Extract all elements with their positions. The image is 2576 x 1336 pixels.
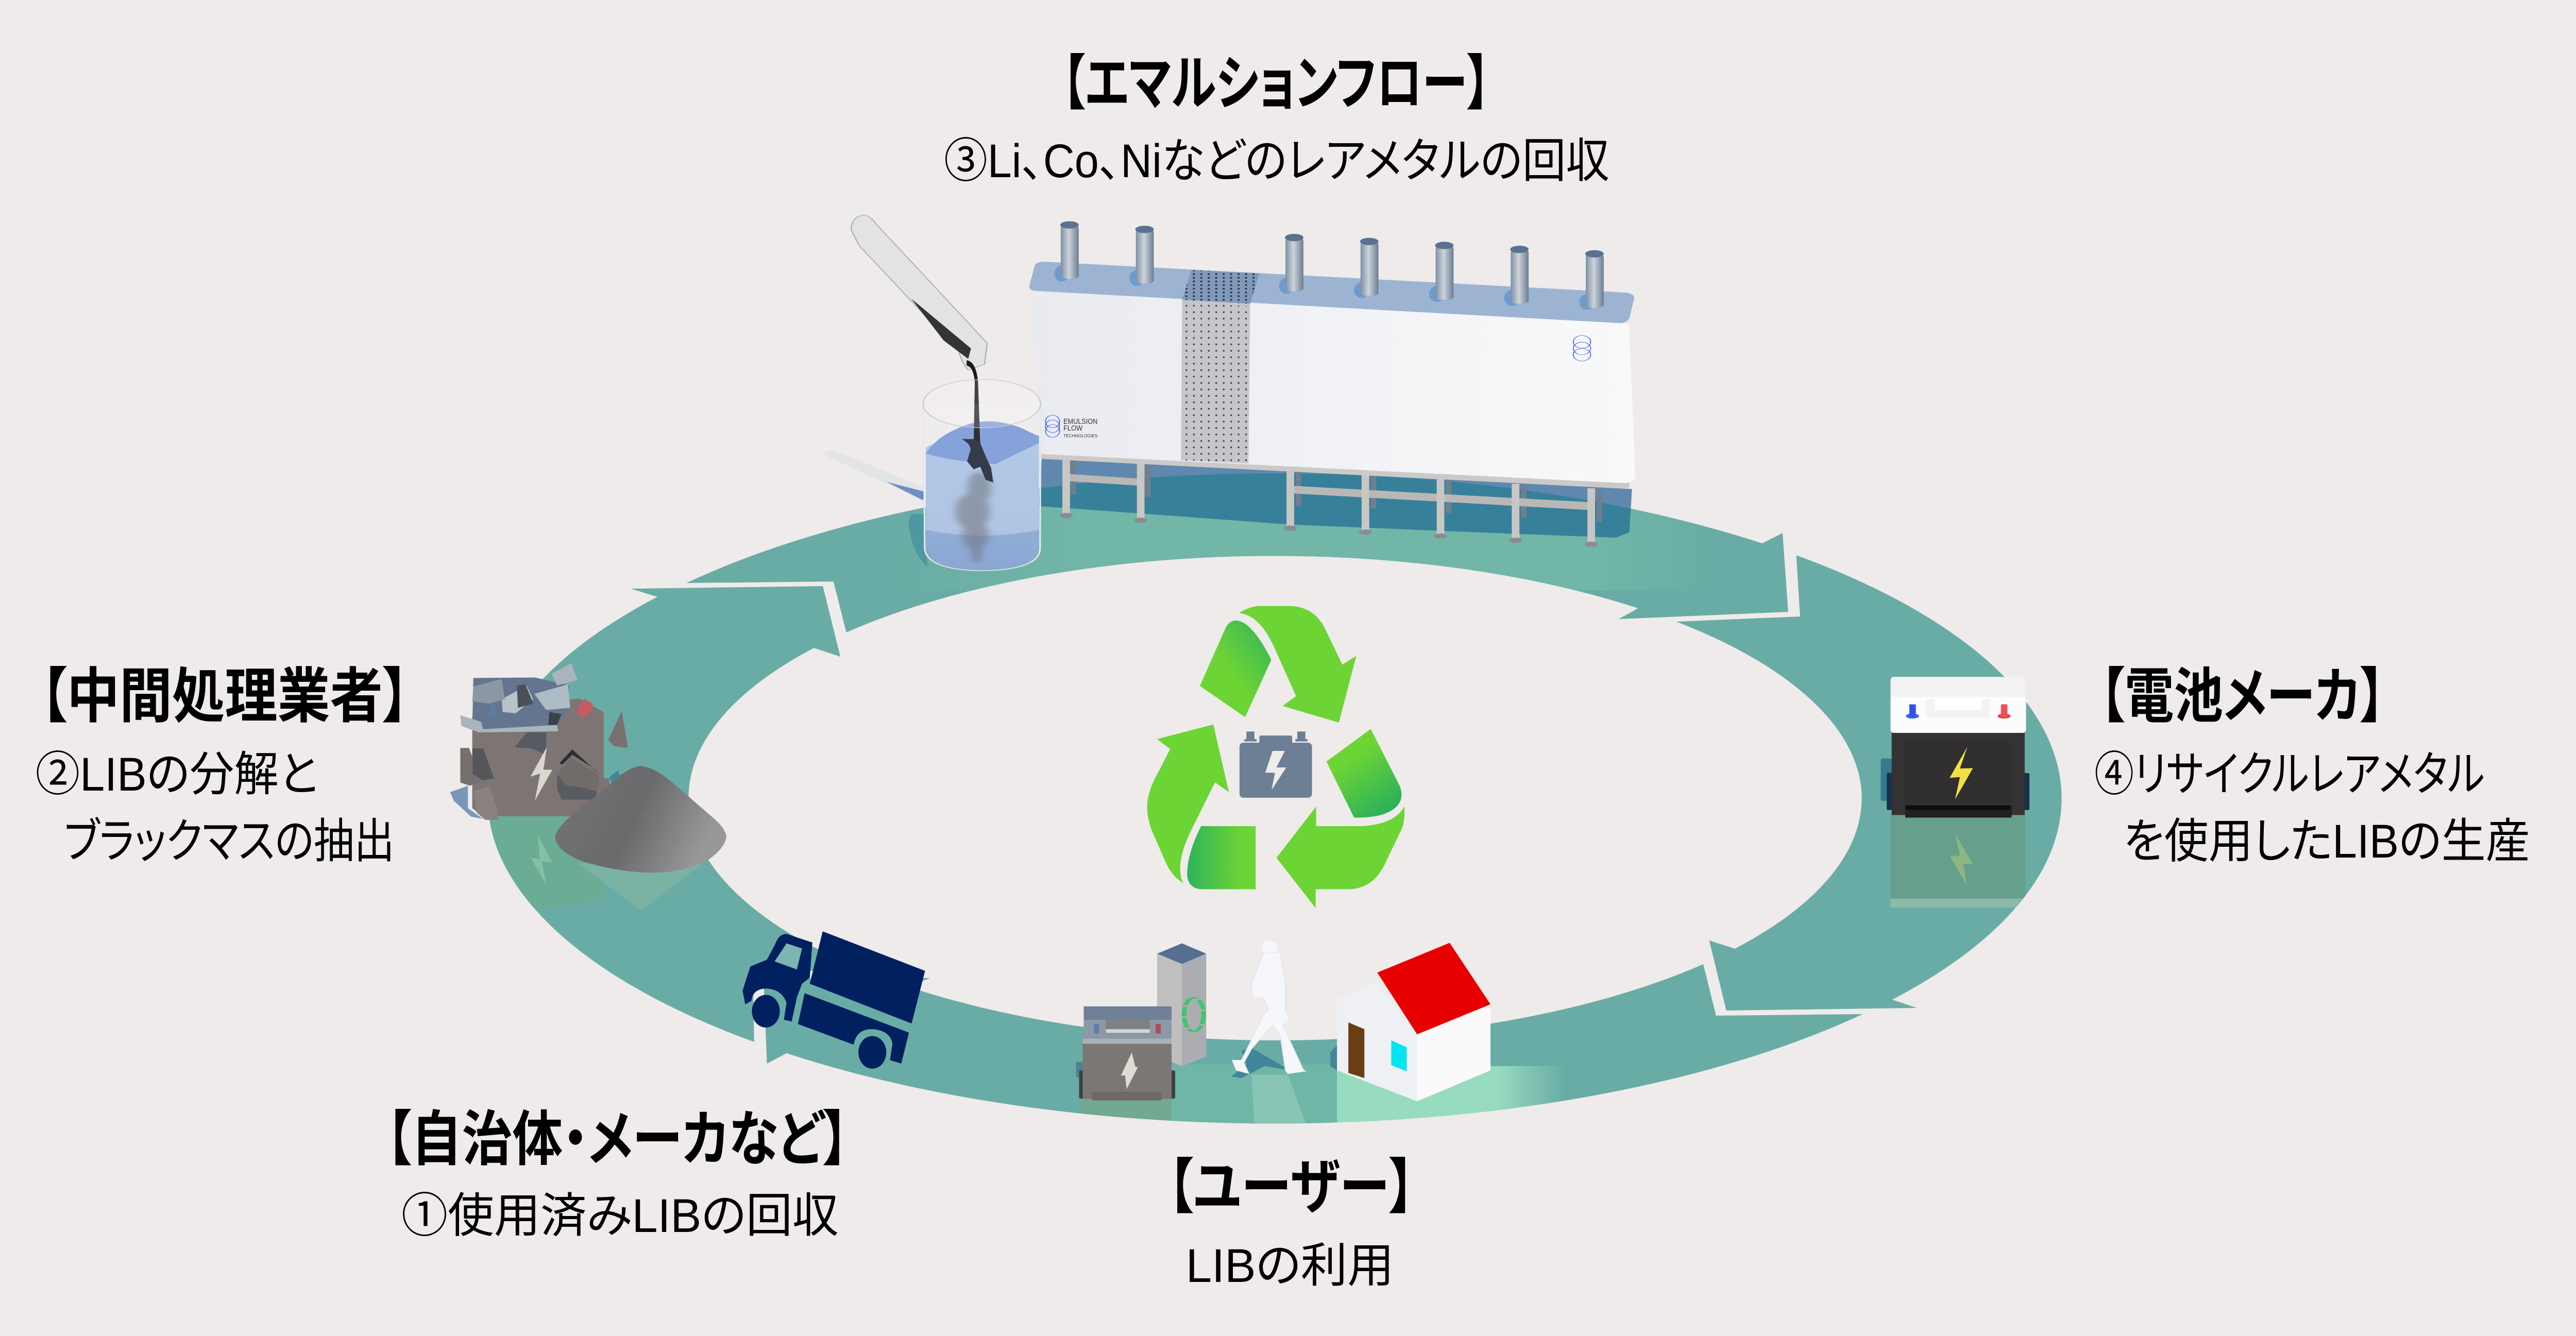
user scene xyxy=(1076,941,1490,1101)
right arrow tail xyxy=(1327,729,1401,818)
arrow: collection to intermediate processor xyxy=(488,586,866,1042)
logo right xyxy=(1573,336,1590,361)
truck box xyxy=(810,931,925,1023)
cross bars xyxy=(1069,474,1138,486)
heading: 【エマルションフロー】 xyxy=(1062,50,1490,117)
description: ①使用済みLIBの回収 xyxy=(401,1189,839,1242)
corner rubble xyxy=(473,786,498,820)
battery shadow xyxy=(1880,759,1892,801)
heading: 【ユーザー】 xyxy=(1168,1154,1414,1221)
emulsion flow machine xyxy=(1029,221,1635,547)
person shadow xyxy=(1231,1048,1291,1078)
machine shadow xyxy=(1039,459,1632,538)
flying chip xyxy=(608,711,628,748)
dark cracks xyxy=(515,732,546,755)
maker name: FLOW xyxy=(1063,424,1082,432)
maker name: EMULSION xyxy=(1063,417,1097,425)
lid rear xyxy=(1891,677,2025,700)
house xyxy=(1330,943,1490,1101)
black mass powder pile xyxy=(555,766,726,872)
description line 1: ②LIBの分解と xyxy=(36,748,318,801)
beaker and test tube xyxy=(821,215,1041,571)
black liquid in tube xyxy=(911,299,971,359)
truck cab xyxy=(742,934,812,1021)
beaker shadow xyxy=(908,514,927,567)
description line 2: を使用したLIBの生産 xyxy=(2124,815,2530,868)
top grille xyxy=(1182,270,1259,304)
recycling symbol with battery xyxy=(1147,606,1404,908)
pipes xyxy=(1061,225,1079,279)
truck icon xyxy=(742,931,925,1069)
arrow: collection to emulsion flow and battery maker xyxy=(686,473,1788,632)
lower water band xyxy=(926,530,1039,570)
battery case xyxy=(472,698,609,819)
lid top xyxy=(472,677,569,729)
description line 1: ④リサイクルレアメタル xyxy=(2094,748,2485,801)
home battery xyxy=(1076,1006,1175,1101)
negative terminal xyxy=(1906,705,1919,718)
test tube xyxy=(851,215,987,370)
red terminal xyxy=(577,699,593,717)
new lithium battery xyxy=(1880,677,2029,817)
heading: 【電池メーカ】 xyxy=(2100,663,2385,730)
floor reflections on the ring xyxy=(492,504,2025,1128)
rock xyxy=(557,757,600,800)
front wheel xyxy=(752,995,780,1027)
door xyxy=(1348,1022,1364,1078)
description: ③Li、Co、Niなどのレアメタルの回収 xyxy=(944,134,1609,187)
front legs xyxy=(1062,459,1595,544)
bolt xyxy=(531,747,552,801)
front grille xyxy=(1181,300,1250,464)
description line 2: ブラックマスの抽出 xyxy=(64,815,395,868)
ink stream xyxy=(967,360,980,443)
machine shadow on ring xyxy=(1039,473,1631,538)
walking person xyxy=(1232,941,1306,1074)
faint reflected tube xyxy=(821,450,925,501)
ink cloud xyxy=(955,472,991,563)
window xyxy=(1391,1040,1407,1071)
back legs xyxy=(1071,460,1602,522)
feet xyxy=(1060,513,1598,547)
side handles xyxy=(1887,773,1893,810)
glass xyxy=(924,404,1041,571)
lid shards xyxy=(552,663,578,686)
cycle ring of four arrows xyxy=(488,473,2062,1123)
water xyxy=(926,435,1039,570)
front panel xyxy=(1031,290,1635,483)
cracked side piece xyxy=(460,748,481,786)
pipe caps xyxy=(1060,221,1604,258)
glass rim xyxy=(923,380,1041,428)
top surface xyxy=(1029,262,1634,323)
blue terminal xyxy=(489,704,496,716)
description: LIBの利用 xyxy=(1186,1239,1394,1292)
label: municipalities and makers xyxy=(386,1106,849,1242)
label: battery maker xyxy=(2094,663,2530,868)
crushed battery xyxy=(450,663,628,820)
label: intermediate processor xyxy=(36,663,409,868)
logo left xyxy=(1045,415,1060,437)
arrow: battery maker to user xyxy=(1676,555,2062,1010)
ground shadow xyxy=(450,786,483,819)
left recycling arrow xyxy=(1147,725,1229,883)
charging tower xyxy=(1157,944,1206,1066)
positive terminal xyxy=(1997,705,2011,718)
maker name: TECHNOLOGIES xyxy=(1063,433,1097,438)
roof xyxy=(1377,943,1490,1034)
label: emulsion flow xyxy=(944,50,1609,187)
top recycling arrow xyxy=(1239,606,1357,723)
maker name xyxy=(1063,417,1097,438)
ink swirl xyxy=(962,439,993,483)
rear wheel xyxy=(858,1036,886,1069)
truck chassis xyxy=(798,993,909,1064)
battery body xyxy=(1892,732,2025,815)
icon: battery xyxy=(1240,731,1312,798)
base frame xyxy=(1040,454,1629,488)
machine body xyxy=(1029,221,1635,547)
right recycling arrow xyxy=(1277,807,1404,908)
arrow: user to collection xyxy=(764,964,1863,1123)
lightning bolt xyxy=(1950,747,1973,799)
blue fragment xyxy=(609,770,622,787)
water surface xyxy=(926,421,1039,464)
label: user xyxy=(1168,1154,1414,1292)
left arrow tail xyxy=(1187,826,1256,889)
top arrow tail xyxy=(1200,621,1272,717)
heading: 【中間処理業者】 xyxy=(41,663,409,730)
pipe shadows xyxy=(1054,266,1595,310)
cab window xyxy=(775,944,802,969)
lid top xyxy=(1891,697,2026,733)
heading: 【自治体・メーカなど】 xyxy=(386,1106,849,1173)
tower recycling mark xyxy=(1184,998,1204,1032)
front ledge xyxy=(1905,805,2012,817)
